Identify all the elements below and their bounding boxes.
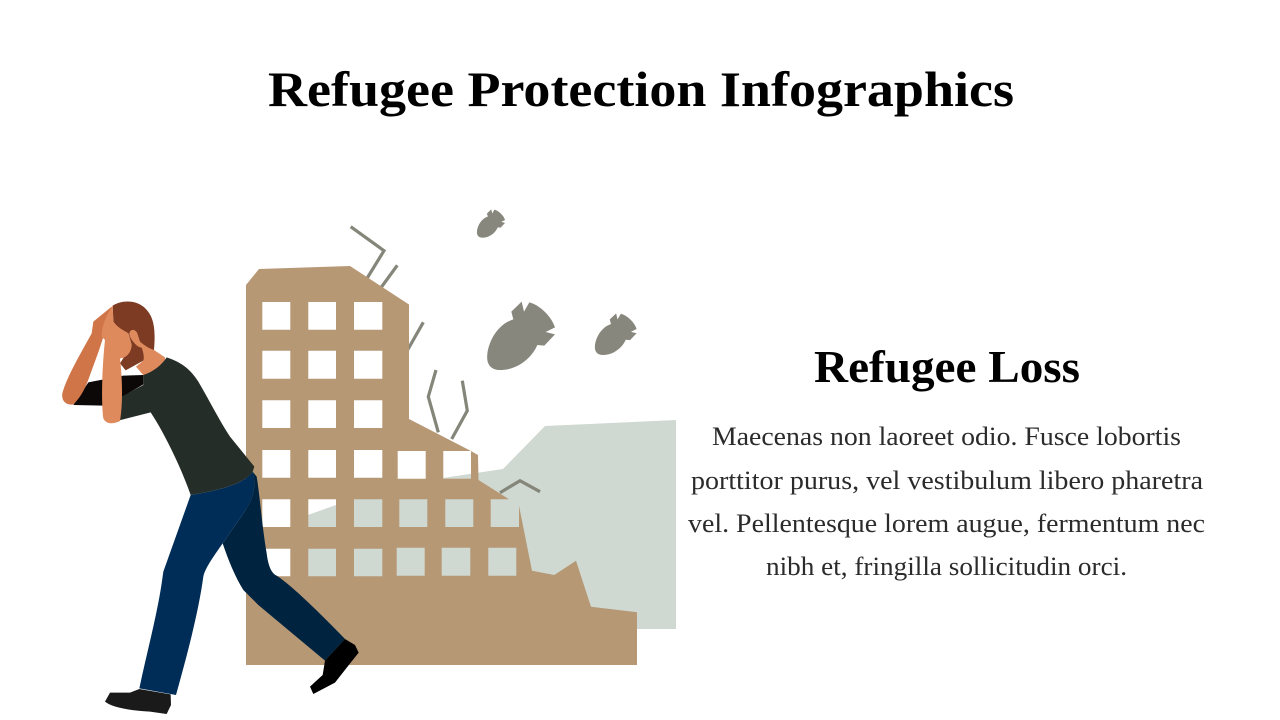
heading: Refugee Loss: Refugee Loss (814, 341, 1080, 392)
body text: nibh et, fringilla sollicitudin orci. (766, 552, 1127, 581)
title: Refugee Protection Infographics (268, 61, 1014, 117)
front leg (139, 472, 254, 695)
illustration: bombed building and fleeing man (62, 209, 676, 714)
back shoe (310, 639, 359, 694)
hair and beard (113, 302, 155, 370)
bomb: right (595, 313, 637, 355)
broken rebar rods (351, 227, 540, 493)
face and near arm (102, 306, 132, 423)
body text: porttitor purus, vel vestibulum libero pharetra (691, 466, 1203, 495)
ear (129, 330, 143, 348)
head and arms (62, 302, 254, 495)
falling bombs (477, 209, 637, 370)
body text (688, 422, 1205, 581)
bomb: large (487, 302, 555, 370)
background hill (300, 420, 676, 629)
back leg (223, 472, 345, 661)
torso (118, 357, 254, 495)
neck (136, 342, 167, 378)
far forearm (62, 307, 112, 405)
far upper arm (73, 375, 143, 406)
damaged building (246, 266, 637, 665)
fleeing man (62, 302, 359, 714)
bomb: top (477, 209, 505, 238)
body text: Maecenas non laoreet odio. Fusce lobortis (712, 422, 1181, 451)
body text: vel. Pellentesque lorem augue, fermentum nec (688, 509, 1205, 538)
front shoe (105, 689, 171, 714)
